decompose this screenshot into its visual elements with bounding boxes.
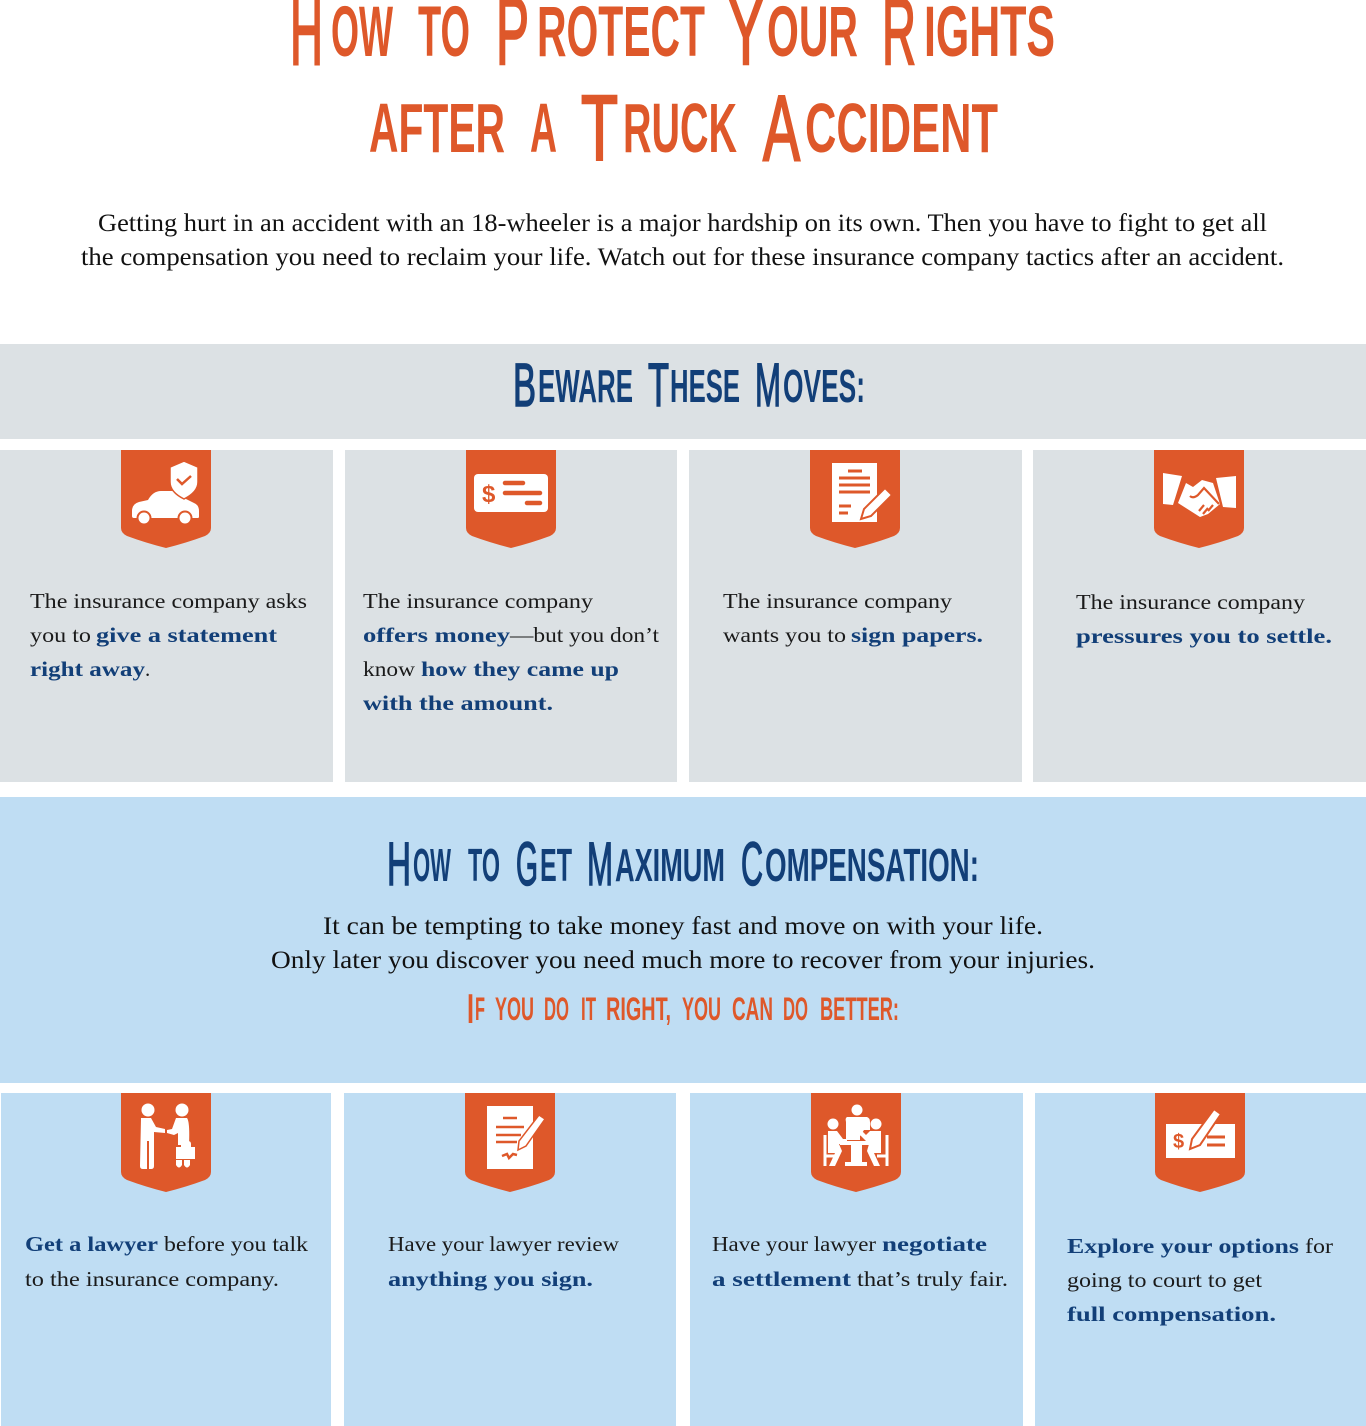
subheading: if you do it right: IT [581, 991, 596, 1027]
text: negotiate [882, 1232, 987, 1256]
heading: how to get maximum compensation: G [516, 830, 538, 898]
intro text: Getting hurt in an accident with an 18-wheeler is a major hardship on its own. Then you have to fight to get all [98, 210, 1267, 237]
text: Get a lawyer [25, 1232, 158, 1256]
text: to the insurance company. [25, 1267, 279, 1291]
title: AFTER [369, 89, 505, 167]
text: pressures you to settle. [1076, 624, 1332, 648]
text: —but you don’t [509, 623, 659, 647]
text [712, 1232, 1008, 1291]
icon: cheque with pen: $ [1173, 1131, 1184, 1153]
text: tempting paragraph: It can be tempting to take money fast and move on with your life. [323, 913, 1043, 940]
text: The insurance company [1076, 590, 1306, 614]
subheading: if you do it right: I [467, 985, 474, 1032]
subheading: if you do it right: F [475, 991, 485, 1027]
subheading: if you do it right [467, 985, 899, 1032]
text: Have your lawyer review [388, 1232, 620, 1256]
text: Have your lawyer [712, 1232, 876, 1256]
subheading: if you do it right: YOU [495, 991, 534, 1027]
panel: compensation card 4 [1035, 1093, 1366, 1426]
text: full compensation. [1067, 1302, 1276, 1326]
heading: beware these moves: EWARE [538, 360, 633, 412]
panel: beware card 1 [0, 450, 333, 782]
text: give a statement [96, 623, 277, 647]
text [25, 1232, 309, 1291]
text: offers money [363, 623, 511, 647]
panel: beware card 2 [345, 450, 677, 782]
text [1076, 590, 1332, 648]
icon: document and pen [810, 450, 900, 548]
subheading: if you do it right: CAN [732, 991, 773, 1027]
heading: how to get maximum compensation: TO [468, 839, 500, 891]
text: going to court to get [1067, 1268, 1262, 1292]
subheading: if you do it right: RIGHT, [606, 991, 671, 1027]
text: before you talk [164, 1232, 309, 1256]
text [388, 1232, 620, 1291]
text: anything you sign. [388, 1267, 593, 1291]
text: know [363, 657, 416, 681]
text: The insurance company [723, 589, 953, 613]
heading: beware these moves [513, 351, 865, 419]
text: tempting paragraph [271, 913, 1095, 974]
heading: beware these moves: T [648, 351, 669, 419]
heading: how to get maximum compensation: H [387, 830, 411, 898]
icon: cheque: $ [482, 481, 496, 508]
panel: beware card 3 [689, 450, 1022, 782]
subheading: if you do it right: YOU [682, 991, 721, 1027]
text: wants you to [723, 623, 846, 647]
heading: how to get maximum compensation: ET [540, 839, 572, 891]
title: A [763, 76, 800, 180]
heading: beware these moves: M [755, 351, 781, 419]
text [1067, 1234, 1333, 1326]
text: you to [30, 623, 91, 647]
icon: signed document [465, 1093, 555, 1192]
heading: beware these moves: HESE [670, 360, 740, 412]
title: A [530, 89, 557, 167]
text: right away [30, 657, 146, 681]
icon: cheque [466, 450, 556, 548]
heading: beware these moves: OVES: [783, 360, 865, 412]
text: how they came up [421, 657, 619, 681]
subheading: if you do it right: BETTER: [820, 991, 899, 1027]
text: sign papers. [851, 623, 983, 647]
heading: beware these moves: B [513, 351, 536, 419]
text: The insurance company asks [30, 589, 307, 613]
text: tempting paragraph: Only later you discover you need much more to recover from your injuries. [271, 947, 1095, 974]
panel: compensation card 3 [690, 1093, 1023, 1426]
text [30, 589, 307, 681]
heading: how to get maximum compensation: OMPENSATION: [765, 839, 979, 891]
text: a settlement [712, 1267, 851, 1291]
subheading: if you do it right: DO [544, 991, 569, 1027]
title: CCIDENT [805, 89, 998, 167]
text [363, 589, 659, 715]
panel: compensation card 1 [1, 1093, 331, 1426]
icon: cheque with pen [1155, 1093, 1245, 1192]
panel: beware card 4 [1033, 450, 1366, 782]
title: T [581, 76, 618, 180]
heading: how to get maximum compensation [387, 830, 979, 898]
icon: meeting at a table [811, 1093, 901, 1192]
icon: two people shaking hands [121, 1093, 211, 1192]
text: The insurance company [363, 589, 594, 613]
text: that’s truly fair. [857, 1267, 1008, 1291]
intro text: the compensation you need to reclaim your life. Watch out for these insurance company tactics after an accident. [81, 244, 1284, 271]
text [723, 589, 983, 647]
heading: how to get maximum compensation: AXIMUM [615, 839, 725, 891]
heading: how to get maximum compensation: M [587, 830, 613, 898]
icon: handshake [1154, 450, 1244, 548]
heading: how to get maximum compensation: OW [413, 839, 451, 891]
subheading: if you do it right: DO [783, 991, 808, 1027]
title: RUCK [623, 89, 737, 167]
panel: beware heading band [0, 344, 1366, 439]
heading: how to get maximum compensation: C [741, 830, 763, 898]
text: with the amount. [363, 691, 553, 715]
icon: car with shield [121, 450, 211, 548]
text: Explore your options [1067, 1234, 1299, 1258]
text: for [1305, 1234, 1333, 1258]
text: . [145, 657, 150, 681]
intro text [81, 210, 1284, 271]
panel: compensation card 2 [344, 1093, 676, 1426]
title [290, 0, 1055, 180]
panel: maximum compensation band [0, 797, 1366, 1083]
